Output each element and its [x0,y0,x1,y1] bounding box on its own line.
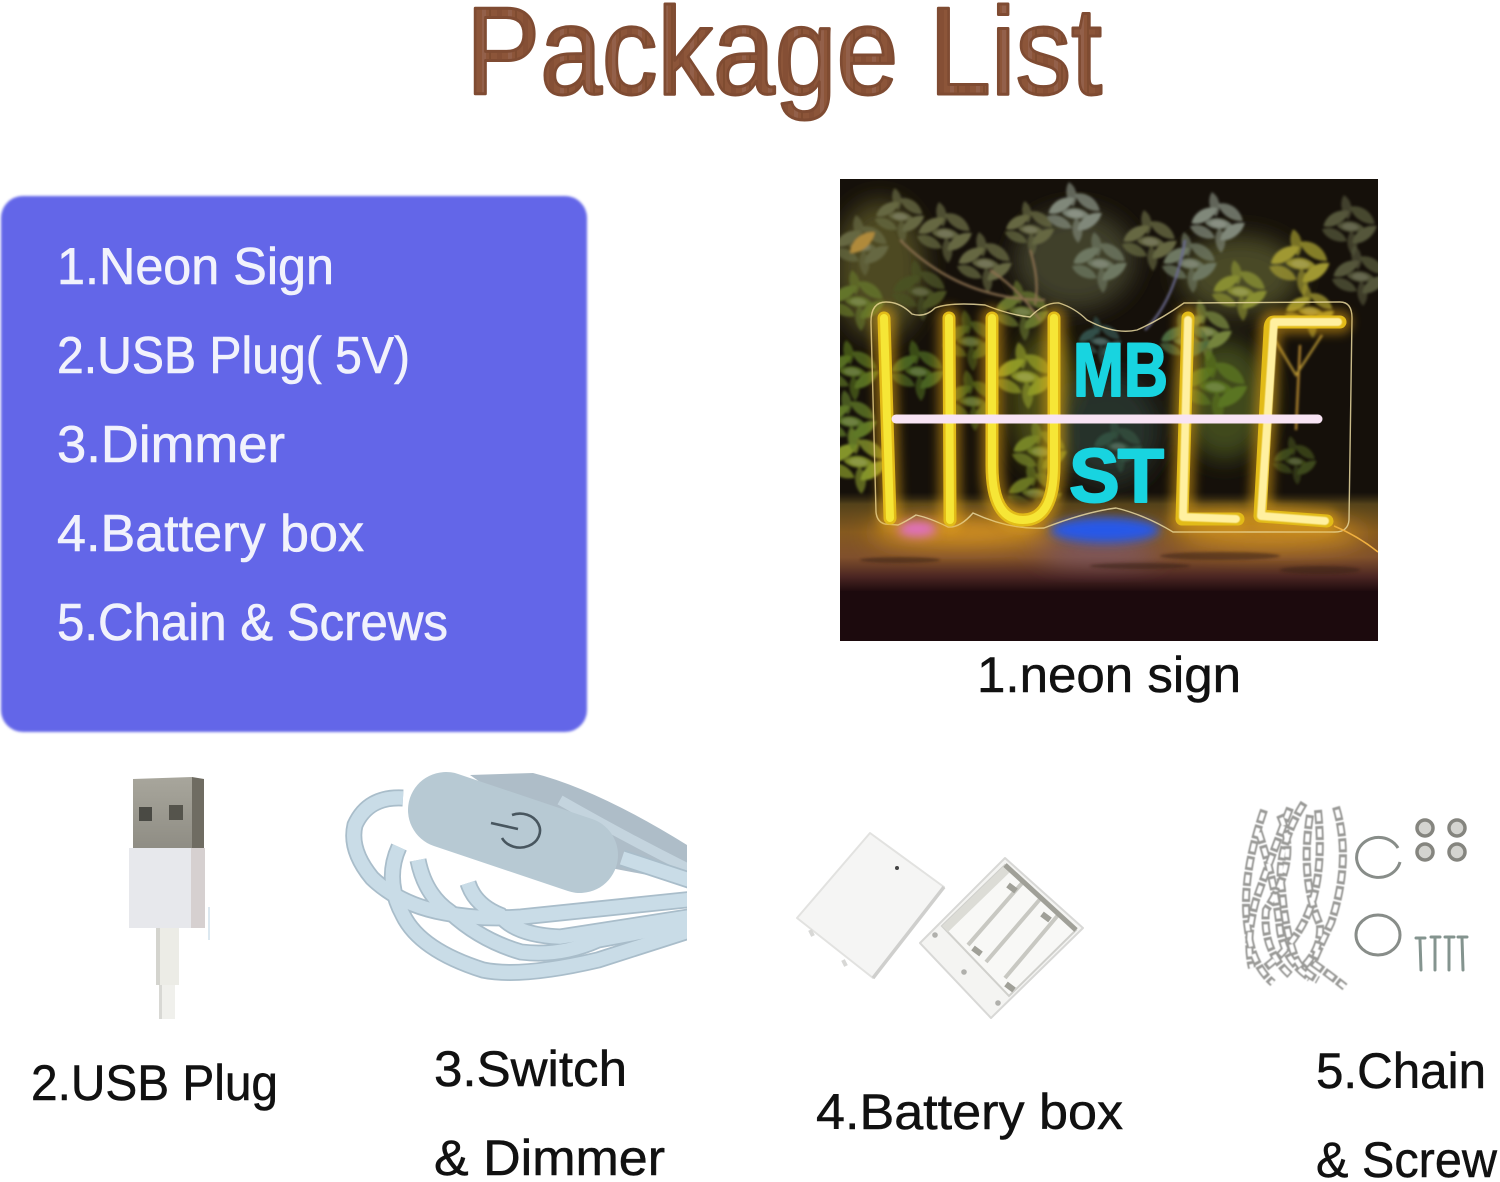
caption: switch and dimmer: 3.Switch [434,1041,627,1097]
strain relief [156,928,179,985]
cable loops [354,798,695,972]
yellow neon letters [884,318,1340,521]
ledge texture [860,552,1360,574]
caption: switch and dimmer [434,1041,665,1182]
plastic sleeve [129,848,191,928]
light reflections [870,518,1365,564]
list item: battery box: 4.Battery box [57,505,364,563]
list item: USB plug: 2.USB Plug( 5V) [57,327,410,385]
list item: neon sign: 1.Neon Sign [57,238,334,296]
cable [159,985,175,1019]
ledge [840,492,1378,592]
icon: switch and dimmer [354,773,695,972]
switch body [446,810,580,855]
list item: dimmer: 3.Dimmer [57,416,285,474]
screws [1416,937,1467,970]
connector shell [133,777,192,848]
icon: chain and screws [1246,803,1467,987]
caption: battery box: 4.Battery box [816,1084,1123,1140]
acrylic plate outline [871,302,1352,532]
caption: USB plug: 2.USB Plug [31,1055,278,1111]
caption: chain and screw [1316,1043,1498,1182]
list item: chain and screws: 5.Chain & Screws [57,594,448,652]
washers [1417,820,1465,860]
icon: USB plug [129,777,210,1019]
caption: neon sign: 1.neon sign [977,647,1241,703]
panel: contents list [1,196,587,732]
chain [1246,803,1345,987]
power cable [1334,526,1378,552]
pink neon crossbar [892,414,1322,424]
upper cable behind switch [470,773,687,875]
battery cover [797,833,944,978]
ST: ST [1069,434,1164,519]
caption: chain and screw: 5.Chain [1316,1043,1486,1099]
battery tray [920,858,1083,1018]
power icon [491,814,540,848]
foliage background [840,182,1378,502]
cyan neon text [1070,342,1166,504]
icon: battery box [797,833,1083,1018]
neon sign photo [820,179,1390,641]
MB: MB [1073,328,1168,413]
rings [1356,837,1400,955]
